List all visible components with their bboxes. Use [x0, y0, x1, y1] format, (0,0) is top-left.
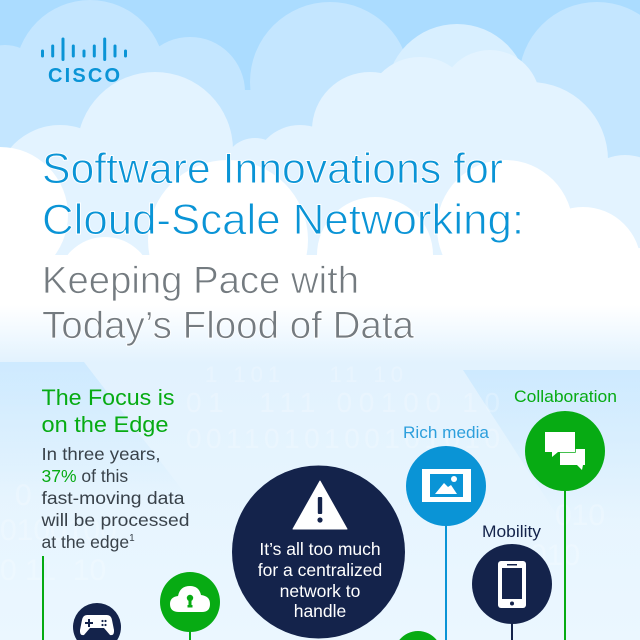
label: Rich media	[403, 424, 490, 442]
back cloud layer	[0, 0, 640, 210]
logo bars	[42, 39, 126, 60]
edge timeline line	[42, 556, 44, 640]
text block: edge statistic: 1	[129, 533, 135, 544]
label: Mobility	[482, 523, 542, 541]
icon: game controller circle	[73, 603, 121, 640]
text block: edge statistic: at the edge	[42, 532, 129, 552]
bottom green circle	[399, 631, 437, 640]
lower background	[0, 362, 640, 640]
mobility node	[472, 523, 552, 640]
heading: the focus is on the edge	[42, 385, 174, 437]
subtitle	[42, 260, 415, 347]
icon: chat bubbles	[545, 432, 585, 470]
label: Collaboration	[514, 388, 617, 406]
white cloud layer	[0, 147, 640, 372]
cloud base fade	[0, 305, 640, 363]
heading: the focus is on the edge: on the Edge	[42, 412, 168, 437]
binary data pattern: 0 11 10	[0, 554, 106, 587]
text block: edge statistic: will be processed	[40, 510, 190, 530]
text block: edge statistic	[40, 444, 190, 552]
left tint panel	[0, 362, 190, 500]
callout text: for a centralized	[258, 560, 382, 580]
rich media node	[403, 424, 490, 640]
binary data pattern: 1 101 11 10	[205, 362, 408, 387]
callout text: network to	[280, 581, 360, 601]
binary data pattern: 0100100	[0, 514, 117, 547]
front cloud layer	[0, 50, 640, 290]
middle cloud layer	[386, 24, 528, 166]
icon: picture	[422, 469, 471, 502]
binary data pattern: 01 111 00100 10	[186, 387, 500, 418]
binary data pattern: 010	[530, 539, 580, 572]
binary data pattern: 010	[555, 499, 605, 532]
Cisco logo	[42, 39, 126, 87]
callout text: It’s all too much	[259, 539, 381, 559]
logo wordmark: CISCO	[48, 65, 120, 87]
text block: edge statistic: In three years,	[42, 444, 160, 464]
subtitle: Keeping Pace with	[42, 260, 359, 302]
binary data pattern: 0	[15, 479, 32, 512]
title: Software Innovations for	[42, 145, 503, 193]
right tint panel	[463, 370, 640, 520]
binary data pattern: 0011010100101010	[186, 423, 500, 454]
icon: warning triangle	[293, 481, 347, 529]
callout text: handle	[294, 601, 346, 621]
heading: the focus is on the edge: The Focus is	[42, 385, 174, 410]
collaboration node	[514, 388, 617, 640]
text block: edge statistic: fast-moving data	[42, 488, 185, 508]
callout text	[258, 539, 382, 621]
binary data pattern	[0, 362, 605, 587]
title	[42, 145, 524, 244]
icon: smartphone	[498, 561, 526, 608]
subtitle: Today’s Flood of Data	[42, 305, 415, 347]
text block: edge statistic: 37% of this	[42, 466, 128, 486]
callout: centralized network warning	[232, 466, 405, 638]
title: Cloud-Scale Networking:	[42, 196, 524, 244]
icon: secure cloud circle	[160, 572, 220, 640]
